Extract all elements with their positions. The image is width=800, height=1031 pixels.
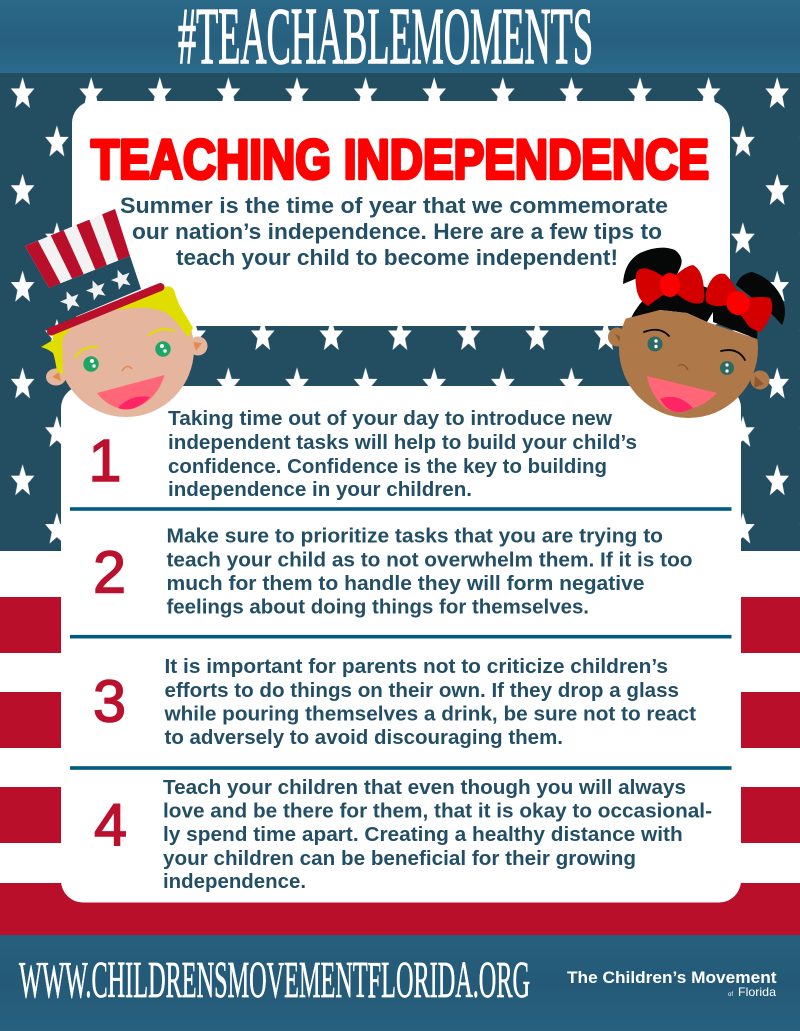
tip 4: independence. bbox=[163, 871, 306, 893]
tip 3 bbox=[93, 656, 696, 749]
tip 4 bbox=[94, 777, 712, 893]
tip 1: Taking time out of your day to introduce new bbox=[168, 408, 612, 430]
background: red and white stripes bbox=[0, 551, 800, 935]
footer band bbox=[0, 935, 800, 1031]
illustration: boy in patriotic hat bbox=[25, 209, 208, 417]
illustration: girl with red bows bbox=[608, 248, 785, 418]
divider 1 bbox=[70, 507, 732, 511]
eyebrows bbox=[75, 329, 174, 357]
tip 4: 4 bbox=[94, 793, 127, 859]
eyes bbox=[83, 341, 171, 372]
tip 4: your children can be beneficial for their growing bbox=[163, 848, 636, 870]
eyes bbox=[648, 336, 734, 375]
logo: The Children's Movement of Florida: of bbox=[728, 992, 733, 998]
hat brim bbox=[51, 287, 160, 332]
tip 3: It is important for parents not to criticize children’s bbox=[164, 656, 668, 678]
logo: The Children's Movement of Florida bbox=[567, 968, 777, 999]
hair bbox=[41, 286, 193, 374]
divider 2 bbox=[70, 635, 732, 638]
nose bbox=[678, 365, 688, 370]
header band bbox=[0, 0, 800, 81]
hat band with stars bbox=[49, 256, 141, 322]
intro text: teach your child to become independent! bbox=[176, 245, 618, 270]
tip 2: much for them to handle they will form negative bbox=[166, 573, 644, 595]
tip 1 bbox=[89, 408, 637, 501]
tip 1: 1 bbox=[89, 428, 121, 494]
ears bbox=[608, 328, 770, 390]
right bow bbox=[706, 274, 772, 332]
tip 1: independence in your children. bbox=[168, 479, 472, 501]
intro text: our nation’s independence. Here are a few tips to bbox=[132, 219, 662, 244]
left bow bbox=[636, 265, 704, 306]
logo: The Children's Movement of Florida: The Children’s Movement bbox=[567, 968, 777, 987]
divider 3 bbox=[70, 766, 732, 770]
intro text: Summer is the time of year that we commemorate bbox=[120, 193, 668, 218]
eyebrows bbox=[644, 330, 745, 360]
tip 2: 2 bbox=[93, 540, 126, 606]
logo: The Children's Movement of Florida: Florida bbox=[738, 985, 776, 999]
tip 3: to adversely to avoid discouraging them. bbox=[164, 727, 563, 749]
face bbox=[619, 310, 758, 418]
tip 2: feelings about doing things for themselves. bbox=[166, 596, 589, 618]
mouth bbox=[647, 376, 717, 412]
tip 3: while pouring themselves a drink, be sure not to react bbox=[163, 704, 696, 726]
tip 1: independent tasks will help to build your child’s bbox=[168, 432, 637, 454]
hair buns and crown bbox=[623, 248, 785, 339]
tip 4: Teach your children that even though you will always bbox=[163, 777, 686, 799]
background: navy star field bbox=[0, 73, 800, 551]
face bbox=[62, 308, 194, 417]
tip 2: teach your child as to not overwhelm them. If it is too bbox=[166, 549, 692, 571]
tip 2 bbox=[93, 526, 692, 618]
intro text bbox=[120, 193, 668, 270]
nose bbox=[122, 366, 132, 371]
mouth bbox=[97, 375, 164, 410]
hat crown stripes bbox=[25, 209, 130, 288]
tip 2: Make sure to prioritize tasks that you are trying to bbox=[166, 526, 663, 548]
ears bbox=[46, 336, 208, 386]
tip 4: ly spend time apart. Creating a healthy distance with bbox=[163, 824, 683, 846]
tip 1: confidence. Confidence is the key to building bbox=[168, 456, 607, 478]
panel: tips bbox=[61, 386, 741, 902]
panel: introduction bbox=[72, 101, 730, 326]
tip 4: love and be there for them, that it is okay to occasional- bbox=[163, 800, 712, 822]
tip 3: 3 bbox=[93, 669, 126, 735]
tip 3: efforts to do things on their own. If they drop a glass bbox=[164, 680, 679, 702]
